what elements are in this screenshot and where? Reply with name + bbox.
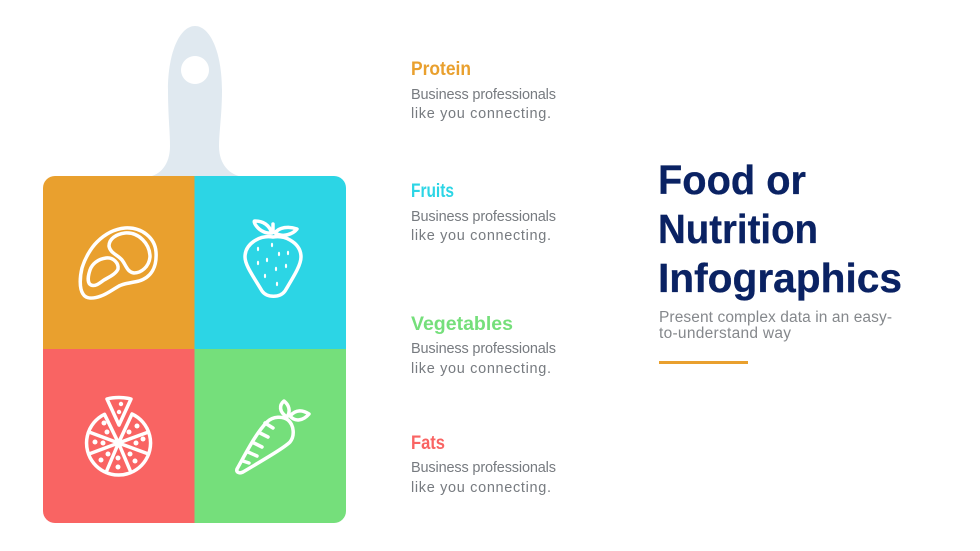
legend: protein (411, 59, 556, 122)
legend: fruits: like you connecting. (411, 228, 551, 244)
legend: fruits (411, 181, 556, 244)
title: Infographics (658, 255, 902, 301)
panel: vegetables (194, 349, 346, 523)
legend: fats: like you connecting. (411, 480, 551, 496)
legend: protein: like you connecting. (411, 106, 551, 122)
subtitle: Present complex data in an easy- (659, 309, 892, 326)
title: Food or (658, 157, 806, 203)
legend: fats: Fats (411, 433, 445, 454)
icon: carrot (237, 401, 309, 473)
title: Nutrition (658, 206, 818, 252)
legend: vegetables: Vegetables (411, 314, 513, 335)
legend: fats: Business professionals (411, 460, 556, 476)
panel: fruits (194, 176, 346, 349)
legend: protein: Business professionals (411, 87, 556, 103)
legend: fruits: Business professionals (411, 209, 556, 225)
icon: pizza (87, 398, 151, 475)
legend: protein: Protein (411, 59, 471, 80)
subtitle: to-understand way (659, 325, 791, 342)
subtitle (659, 309, 892, 342)
panel: fats (43, 349, 194, 523)
icon: strawberry (245, 221, 301, 296)
panel: protein (43, 176, 194, 349)
cutting board (43, 26, 346, 523)
legend: vegetables: like you connecting. (411, 361, 551, 377)
legend: vegetables: Business professionals (411, 341, 556, 357)
board handle (148, 26, 243, 177)
title accent line (659, 361, 748, 364)
legend: vegetables (411, 314, 556, 377)
legend: fruits: Fruits (411, 181, 454, 202)
legend: fats (411, 433, 556, 496)
title (658, 157, 902, 301)
icon: steak (80, 228, 156, 298)
